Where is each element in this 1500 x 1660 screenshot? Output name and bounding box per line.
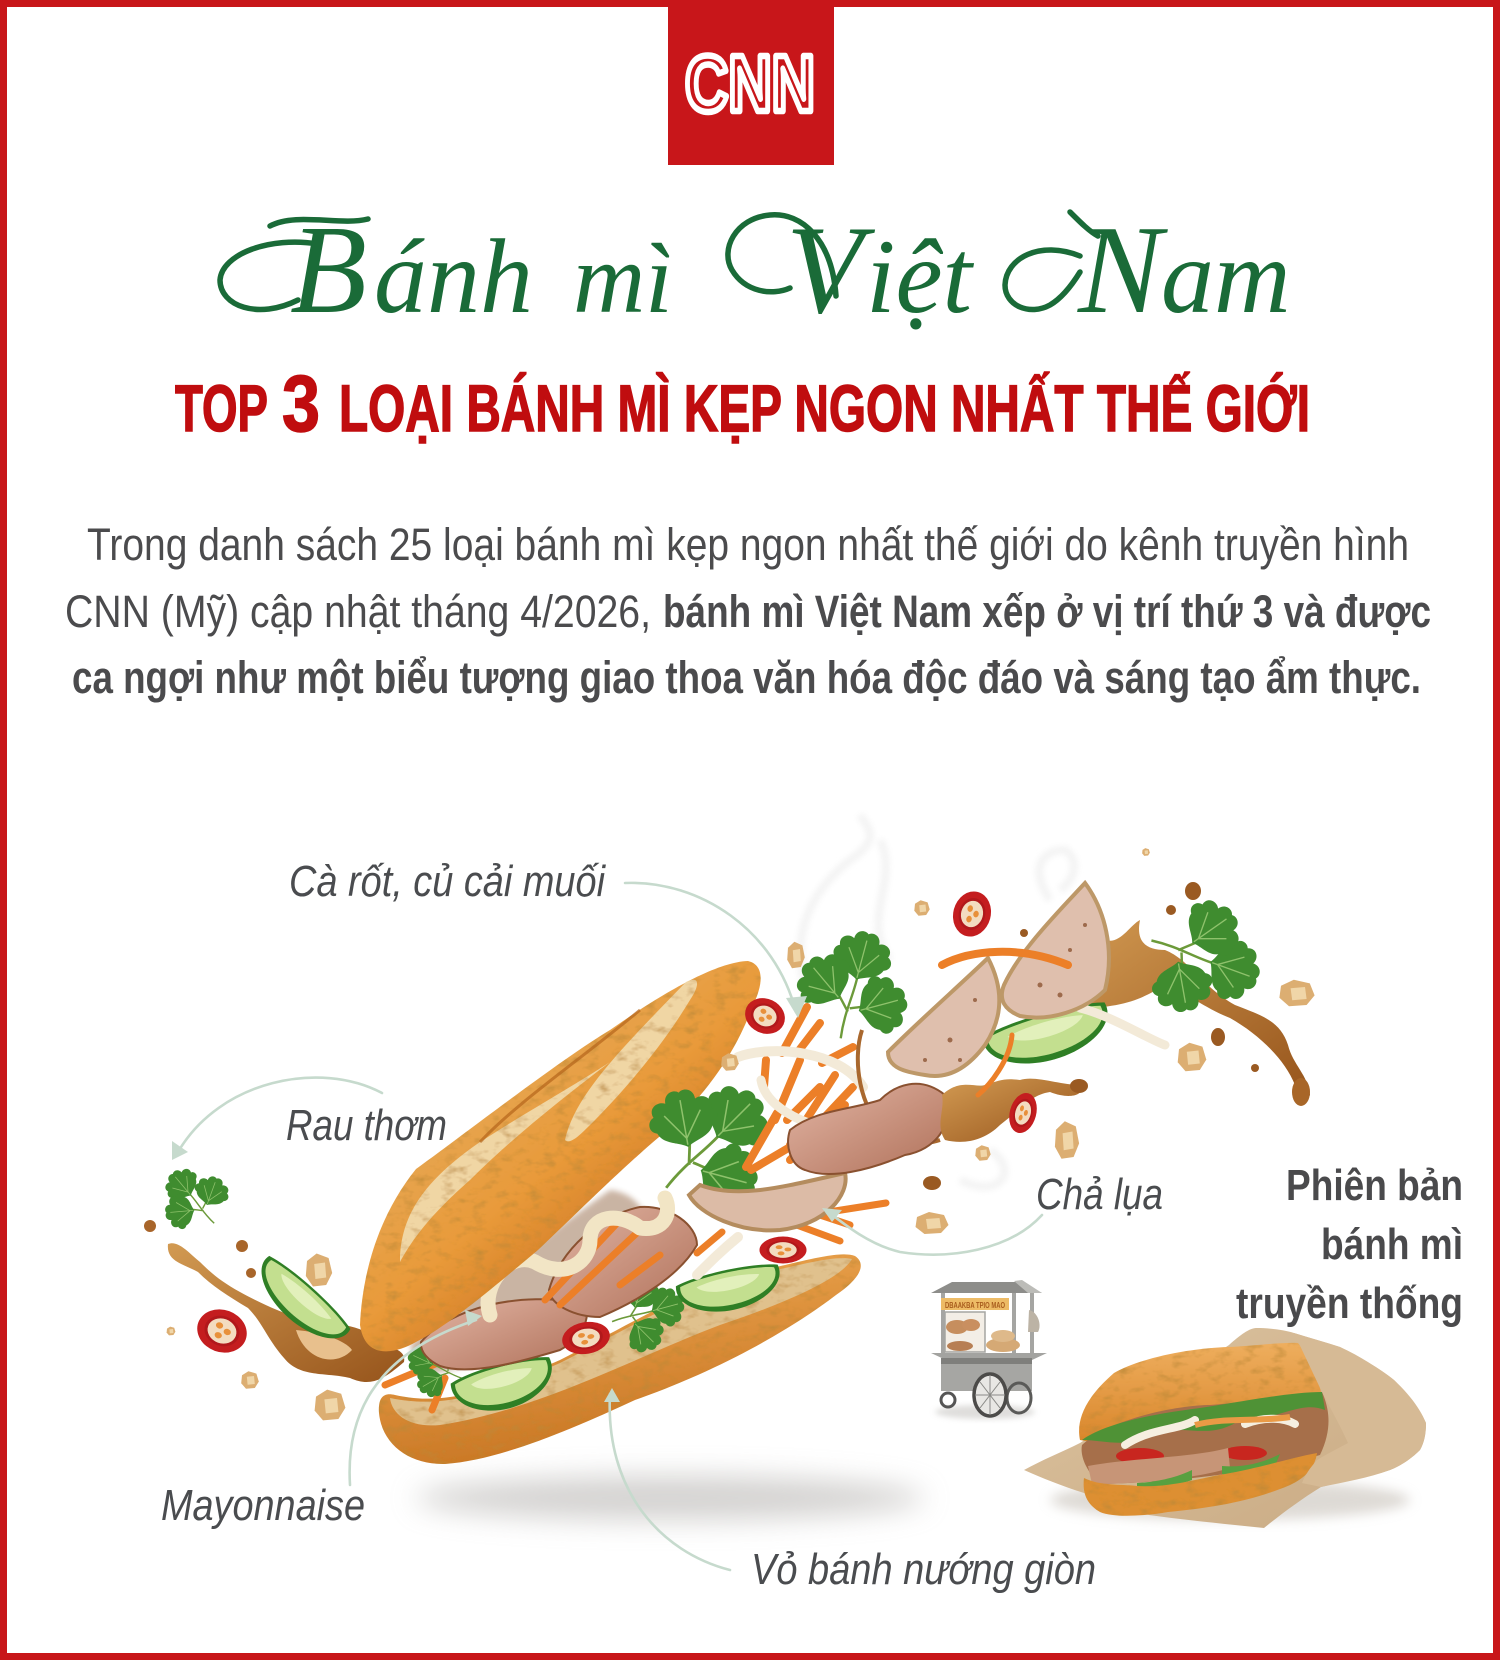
label: pork roll bbox=[822, 1170, 1163, 1255]
sauce splash left bbox=[144, 1220, 404, 1382]
label: carrot radish: Cà rốt, củ cải muối bbox=[289, 857, 606, 906]
sauce middle splash bbox=[940, 1079, 1081, 1142]
label: crust: Vỏ bánh nướng giòn bbox=[751, 1545, 1096, 1594]
title: iệt bbox=[866, 218, 998, 335]
upper meat slice bbox=[549, 1207, 697, 1317]
right sauce splash bbox=[1060, 920, 1310, 1100]
shadow between buns bbox=[410, 1190, 648, 1375]
carrots and radish bbox=[738, 1007, 863, 1170]
subtitle bbox=[175, 359, 1310, 448]
title: ánh bbox=[374, 218, 560, 335]
title: B bbox=[290, 201, 367, 340]
traditional version caption: truyền thống bbox=[1236, 1279, 1463, 1328]
paper front bbox=[1294, 1333, 1426, 1487]
food cart bbox=[931, 1280, 1047, 1419]
flying ingredients right bbox=[738, 874, 1310, 1190]
chilies bbox=[948, 887, 1041, 1136]
speckles on slices bbox=[923, 923, 1087, 1062]
small bun bottom bbox=[1084, 1453, 1317, 1516]
title: N bbox=[1077, 201, 1168, 340]
flying meat bbox=[788, 1084, 948, 1174]
traditional version caption bbox=[1236, 1161, 1463, 1328]
sandwich ground shadow bbox=[415, 1476, 925, 1520]
top bun bbox=[360, 961, 761, 1351]
lower veg and meat bbox=[385, 1237, 807, 1421]
center cilantro bbox=[610, 1040, 813, 1244]
label: herbs: Rau thơm bbox=[286, 1101, 447, 1150]
CNN logo block: CNN bbox=[685, 39, 815, 128]
traditional version caption: bánh mì bbox=[1321, 1220, 1463, 1269]
carrot stick over slices bbox=[942, 952, 1068, 965]
CNN logo block bbox=[668, 0, 834, 165]
label: mayonnaise bbox=[161, 1310, 482, 1530]
cha lua slice B bbox=[888, 958, 999, 1076]
traditional wrapped banh mi bbox=[1024, 1328, 1426, 1528]
steam bbox=[800, 815, 1074, 1187]
cucumber and chili left bbox=[141, 1147, 354, 1359]
subtitle: 3 bbox=[282, 359, 320, 448]
mayonnaise squiggle bbox=[488, 1198, 668, 1315]
title: V bbox=[786, 201, 876, 340]
paper back bbox=[1024, 1328, 1426, 1528]
cha lua slice A bbox=[1002, 883, 1109, 1018]
film of sauce bbox=[858, 1030, 940, 1143]
label: carrot radish bbox=[289, 857, 807, 1018]
traditional version caption: Phiên bản bbox=[1286, 1161, 1463, 1210]
small sandwich filling bbox=[1082, 1392, 1328, 1489]
carrot and radish in bun bbox=[545, 1203, 886, 1305]
label: crust bbox=[604, 1388, 1096, 1594]
title: am bbox=[1161, 218, 1291, 335]
cucumber right bbox=[980, 996, 1117, 1077]
chili beside bun top bbox=[739, 992, 791, 1040]
intro paragraph bbox=[65, 519, 1431, 703]
label: pork roll: Chả lụa bbox=[1036, 1170, 1163, 1219]
small bun top bbox=[1079, 1343, 1321, 1442]
bottom bun bbox=[379, 1254, 861, 1464]
cilantro right bbox=[1128, 874, 1282, 1044]
sauce drips at ends bbox=[1292, 1078, 1310, 1106]
title: mì bbox=[573, 223, 698, 334]
bread crumbs bbox=[167, 848, 1315, 1420]
subtitle: TOP bbox=[175, 371, 268, 445]
droplets bbox=[923, 882, 1259, 1190]
label: mayonnaise: Mayonnaise bbox=[161, 1481, 365, 1530]
intro paragraph: CNN (Mỹ) cập nhật tháng 4/2026, bbox=[65, 586, 651, 637]
cha lua slice center bbox=[689, 1173, 846, 1230]
cilantro upper bbox=[775, 915, 934, 1056]
label: herbs bbox=[172, 1078, 447, 1160]
food cart: DBAAKBA TPIO MAO bbox=[945, 1301, 1005, 1310]
title bbox=[220, 201, 1291, 340]
main sandwich bbox=[144, 961, 886, 1464]
